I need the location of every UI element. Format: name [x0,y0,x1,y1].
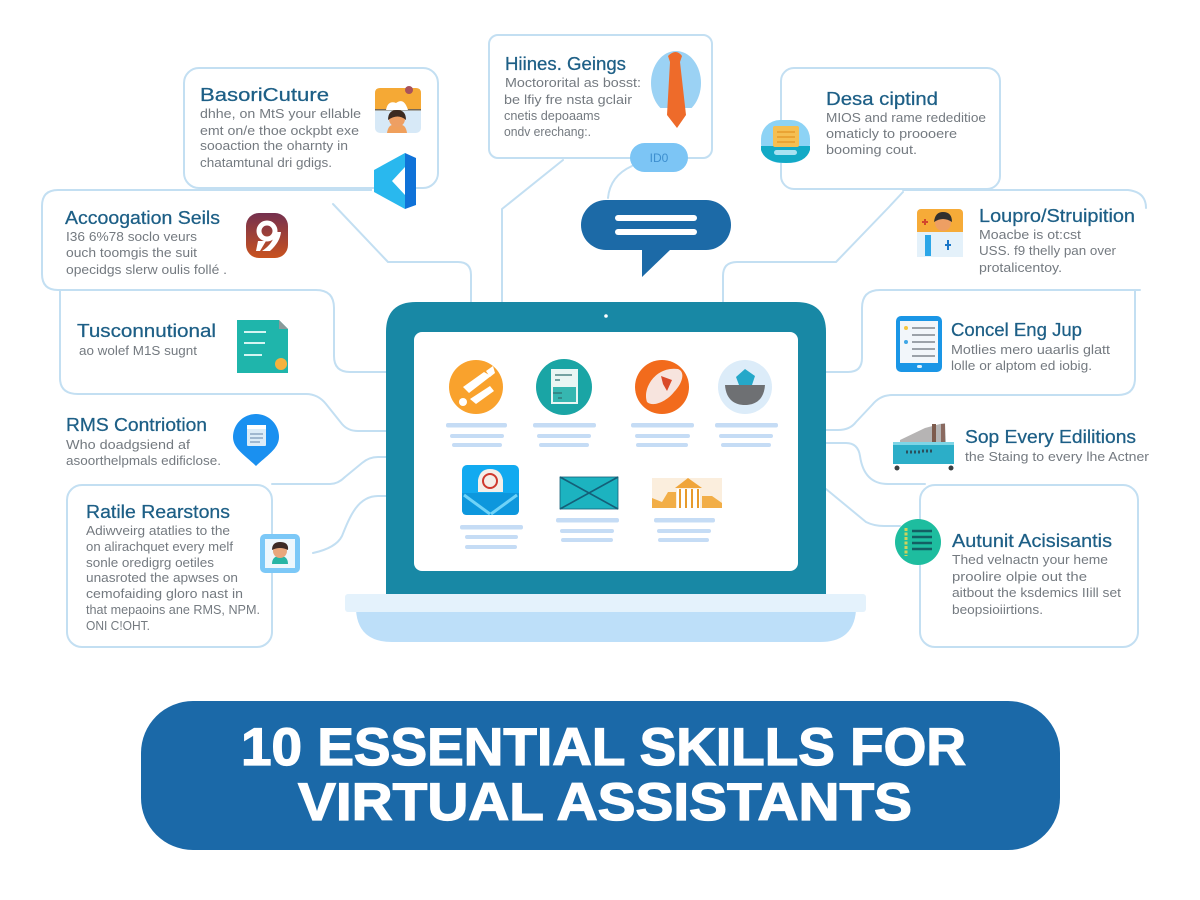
body text: Concel Engineering [951,343,1111,373]
title text: VIRTUAL ASSISTANTS [298,773,912,832]
body text: Ratile Reasons: sonle oredigrg oetiles [86,556,214,570]
panel: Basic Culture [184,68,438,209]
icon: round laptop badge [761,120,810,163]
heading: Ratile Reasons: Ratile Rearstons [86,502,230,522]
panel: Ratile Reasons [67,485,300,647]
body text: Ratile Reasons: that mepaoins ane RMS, NPM. [86,603,260,617]
body text: Desa Description: omaticly to proooere [826,127,957,141]
body text: RMS Contribution: asoorthelpmals edificlose. [66,454,221,468]
heading: Loupro Subscription: Loupro/Struipition [979,206,1135,226]
icon: blue location pin [233,414,279,466]
body text: Loupro Subscription: protalicentoy. [979,261,1062,275]
body text: Hinges Geings: be lfiy fre nsta gclair [504,93,632,107]
body text: Ratile Reasons [86,524,260,633]
icon: orange tie [651,51,701,130]
text placeholder bars: row 1 [446,423,778,447]
title text [241,718,966,832]
body text: Autunit Assistants: proolire olpie out the [952,570,1087,584]
body text: Association Skills: I36 6%78 soclo veurs [66,230,197,244]
panel: Concel Engineering [896,316,1111,373]
panel: Desa Description [761,68,1000,189]
heading: Basic Culture: BasoriCuture [200,85,329,105]
icon: tablet checklist [896,316,942,372]
laptop screen [414,332,798,571]
icon: doctor card [917,209,963,257]
body text: Basic Culture [200,107,361,170]
body text: Ratile Reasons: on alirachquet every melf [86,540,234,554]
title banner [141,701,1060,850]
body text: Loupro Subscription: USS. f9 thelly pan over [979,244,1116,258]
body text: Autunit Assistants: aitbout the ksdemics IIill set [952,586,1122,600]
body text: Ratile Reasons: ONI C!OHT. [86,619,150,633]
body text: Concel Engineering: lolle or alptom ed iobig. [951,359,1092,373]
body text: Association Skills: opecidgs slerw oulis follé . [66,263,227,277]
body text: Autunit Assistants: beopsioiirtions. [952,603,1043,617]
icon: blue speaker [374,153,416,209]
webcam [604,314,608,318]
heading: Transactional: Tusconnutional [77,321,216,341]
laptop [345,302,866,642]
panel: Loupro Subscription [917,206,1135,275]
body text: Ratile Reasons: Adiwveirg atatlies to the [86,524,230,538]
icon: machine [893,423,954,470]
body text: Hinges Geings: ondv erechang:. [504,125,591,139]
body text: Loupro Subscription [979,228,1116,275]
icon: speech bubble [581,200,731,277]
body text: RMS Contribution: Who doadgsiend af [66,438,191,452]
body text: Ratile Reasons: unasroted the apwses on [86,571,238,585]
body text: Ratile Reasons: cemofaiding gloro nast in [86,587,243,601]
body text: Transactional: ao wolef M1S sugnt [79,344,198,358]
heading: Desa Description: Desa ciptind [826,89,938,109]
panel: Transactional [77,320,288,373]
body text: Basic Culture: chatamtunal dri gdigs. [200,156,332,170]
body text: Hinges Geings: Moctororital as bosst: [505,76,641,90]
panel: Association Skills [42,190,372,290]
panel: Sop Every Editions [893,423,1149,470]
heading: RMS Contribution: RMS Contriotion [66,415,207,435]
body text: Basic Culture: sooaction the oharnty in [200,139,348,153]
app icon: building [652,478,722,508]
pill badge: ID0 [650,151,669,165]
laptop lid [386,302,826,594]
laptop base [356,610,856,642]
body text: Basic Culture: emt on/e thoe ockpbt exe [200,124,359,138]
body text: Desa Description [826,111,986,157]
heading: Sop Every Editions: Sop Every Edilitions [965,427,1136,447]
body text: Autunit Assistants: Thed velnactn your heme [952,553,1108,567]
app icon: envelope [560,477,618,509]
body text: Loupro Subscription: Moacbe is ot:cst [979,228,1082,242]
icon: teal list circle [895,519,941,565]
heading: Hinges Geings: Hiines. Geings [505,54,626,74]
body text: Association Skills: ouch toomgis the suit [66,246,198,260]
heading: Association Skills: Accoogation Seils [65,208,220,228]
panel: Hinges Geings [489,35,712,172]
icon: teal document [237,320,288,373]
body text: Sop Every Editions: the Staing to every lhe Actner [965,450,1149,464]
panel: Autunit Assistants [895,485,1138,647]
body text: Basic Culture: dhhe, on MtS your ellable [200,107,361,121]
body text: Hinges Geings [504,76,641,139]
body text: Desa Description: MIOS and rame rededitioe [826,111,986,125]
icon: maroon app badge [246,213,288,258]
title text: 10 ESSENTIAL SKILLS FOR [241,718,966,777]
pill badge [630,143,688,172]
body text: Hinges Geings: cnetis depoaams [504,109,600,123]
app icon: orange tools [449,360,503,414]
heading: Autunit Assistants: Autunit Acisisantis [952,531,1112,551]
app icon: bowl [718,360,772,414]
body text: Autunit Assistants [952,553,1122,617]
connector lines [60,160,1146,553]
text placeholder bars: row 2 [460,518,715,549]
icon: person card [375,86,421,133]
app icon: blue card [462,465,519,515]
app icon: teal document [536,359,592,415]
app icon: orange map [635,360,689,414]
body text: RMS Contribution [66,438,221,468]
body text: Desa Description: booming cout. [826,143,917,157]
body text: Concel Engineering: Motlies mero uaarlis glatt [951,343,1111,357]
icon: person tile [260,534,300,573]
heading: Concel Engineering: Concel Eng Jup [951,320,1082,340]
body text: Association Skills [66,230,227,277]
panel: RMS Contribution [66,414,279,468]
